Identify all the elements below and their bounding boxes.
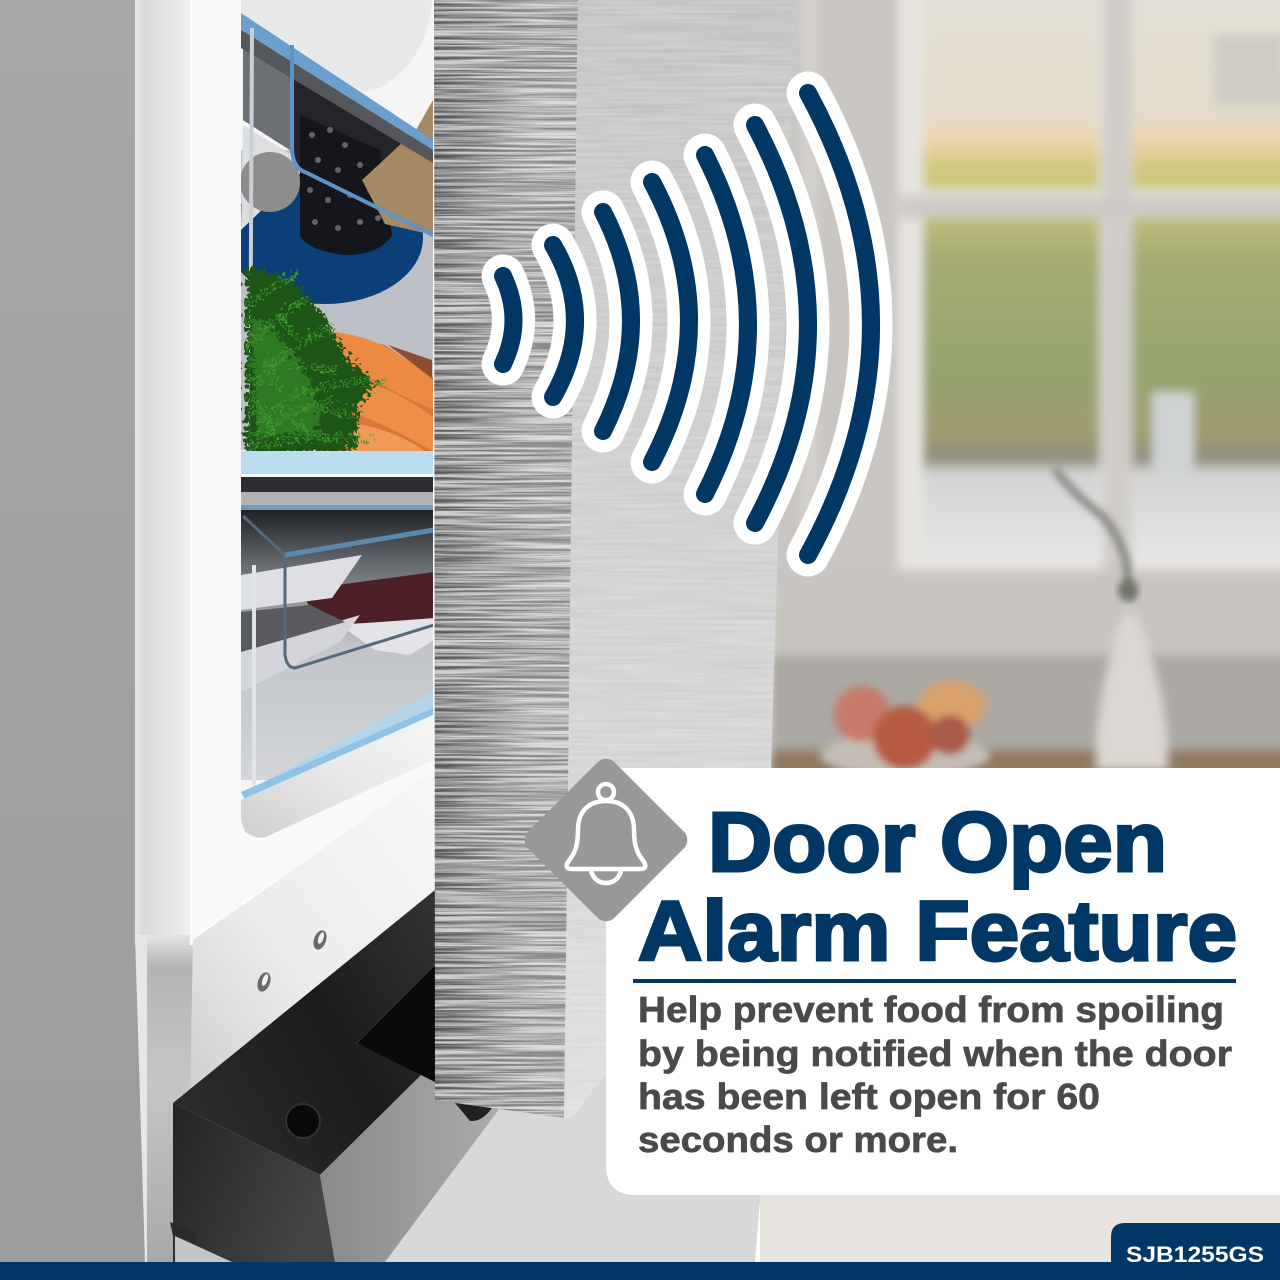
carrots: [325, 332, 434, 455]
model badge: [1111, 1223, 1280, 1267]
sound waves icon: [503, 93, 871, 555]
heading underline: [633, 979, 1236, 983]
carrot leaves: [241, 262, 380, 450]
model badge: SJB1255GS: [1126, 1242, 1264, 1267]
description text: has been left open for 60: [638, 1076, 1100, 1117]
fridge cabinet left side: [0, 0, 434, 1262]
drawer blue lip: [261, 692, 433, 784]
vase: [1096, 612, 1168, 770]
description text: seconds or more.: [638, 1119, 958, 1160]
door side face: [560, 0, 810, 1130]
refrigerator interior: [227, 0, 434, 840]
heading: Door Open: [708, 795, 1167, 889]
berry box: [300, 115, 392, 255]
back wall: [241, 150, 434, 450]
brown package: [362, 100, 433, 235]
white bowl at top: [241, 0, 432, 92]
upper glass bin: [243, 31, 401, 166]
bottom bar: [0, 1262, 1280, 1280]
lower white panel: [190, 770, 436, 1095]
drawer glass edges: [243, 516, 434, 790]
door front brushed face: [434, 0, 578, 1118]
description text: [638, 989, 1232, 1160]
description text: by being notified when the door: [638, 1033, 1232, 1074]
fruit bowl: [820, 681, 990, 777]
black hinge bracket: [170, 890, 500, 1262]
description text: Help prevent food from spoiling: [638, 989, 1224, 1030]
lower drawer: [241, 510, 434, 780]
shelf front: [241, 451, 434, 474]
heading: [638, 795, 1237, 978]
door lower extension: [383, 1050, 772, 1262]
blue shelf edge: [241, 13, 433, 150]
heading: Alarm Feature: [638, 884, 1237, 978]
mounting screws: [255, 929, 329, 993]
blue bowl: [227, 172, 423, 304]
icon: bell in diamond: [520, 754, 692, 926]
meat trays: [241, 555, 434, 692]
info card: [606, 768, 1280, 1195]
plant stem: [1055, 470, 1130, 600]
blurred kitchen background: [760, 0, 1280, 1280]
